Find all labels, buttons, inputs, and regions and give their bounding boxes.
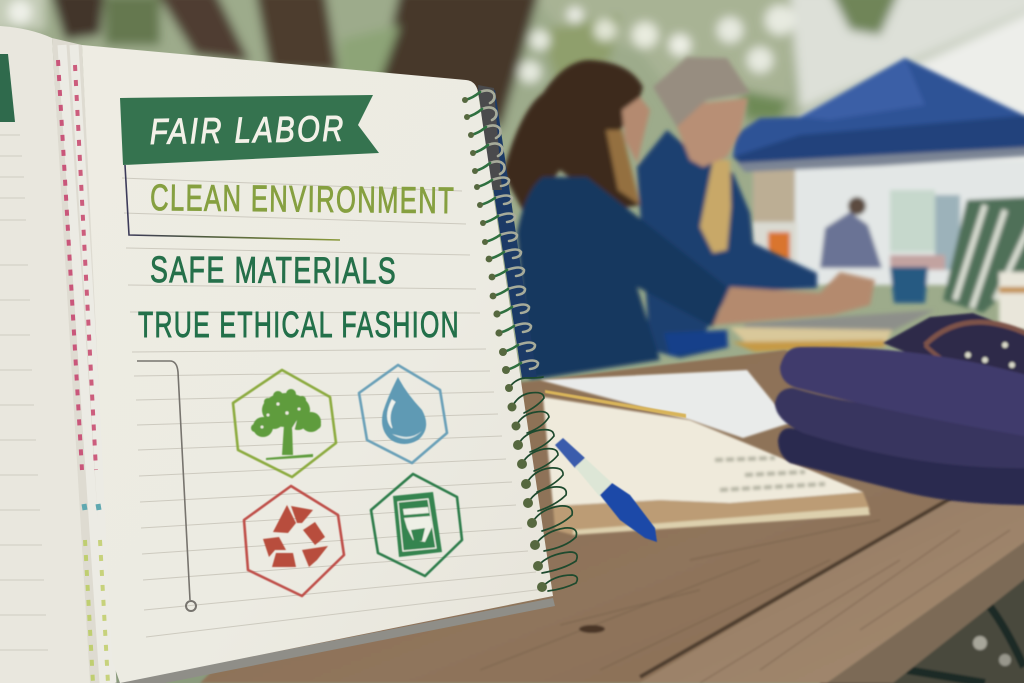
banner: fair labor	[120, 95, 379, 165]
notebook: back cover edge	[478, 88, 537, 378]
spiral binding	[462, 90, 577, 592]
text: clean environment: CLEAN ENVIRONMENT	[150, 177, 455, 221]
blurred background: two women working	[503, 57, 875, 380]
notebook: left page	[0, 26, 92, 683]
icon: water drop hexagon	[359, 365, 447, 463]
background paper sheet	[540, 370, 790, 438]
wooden table	[200, 350, 1024, 683]
notebook: main page	[82, 45, 553, 683]
heading underline frame	[125, 165, 340, 240]
icon: safe materials label hexagon	[371, 474, 462, 576]
coil holes	[462, 97, 547, 592]
pencil	[545, 390, 686, 418]
icon: tree hexagon	[233, 370, 336, 477]
open book	[543, 397, 870, 535]
notebook: bottom edge	[115, 598, 555, 683]
pen	[555, 438, 657, 542]
upper coils: green wires	[465, 92, 521, 370]
notebook: left page green tab	[0, 54, 15, 122]
lower coils: dark wires	[509, 377, 577, 591]
blurred background: trees and sky	[0, 0, 1024, 380]
icon: recycling hexagon	[244, 486, 344, 596]
text: safe materials: SAFE MATERIALS	[150, 249, 397, 291]
purple folded scarves and bag	[775, 313, 1024, 505]
timeline marker line	[137, 361, 196, 611]
banner: fair labor: FAIR LABOR	[149, 108, 346, 152]
notebook: ribbon strip	[52, 38, 115, 683]
notebook: ruled lines	[122, 178, 544, 637]
upper coils: metal backs	[480, 90, 538, 369]
notebook: left page ruled lines	[0, 135, 48, 650]
text: true ethical fashion: TRUE ETHICAL FASHION	[138, 304, 460, 345]
blurred background: market tent and crowd	[730, 58, 1024, 352]
